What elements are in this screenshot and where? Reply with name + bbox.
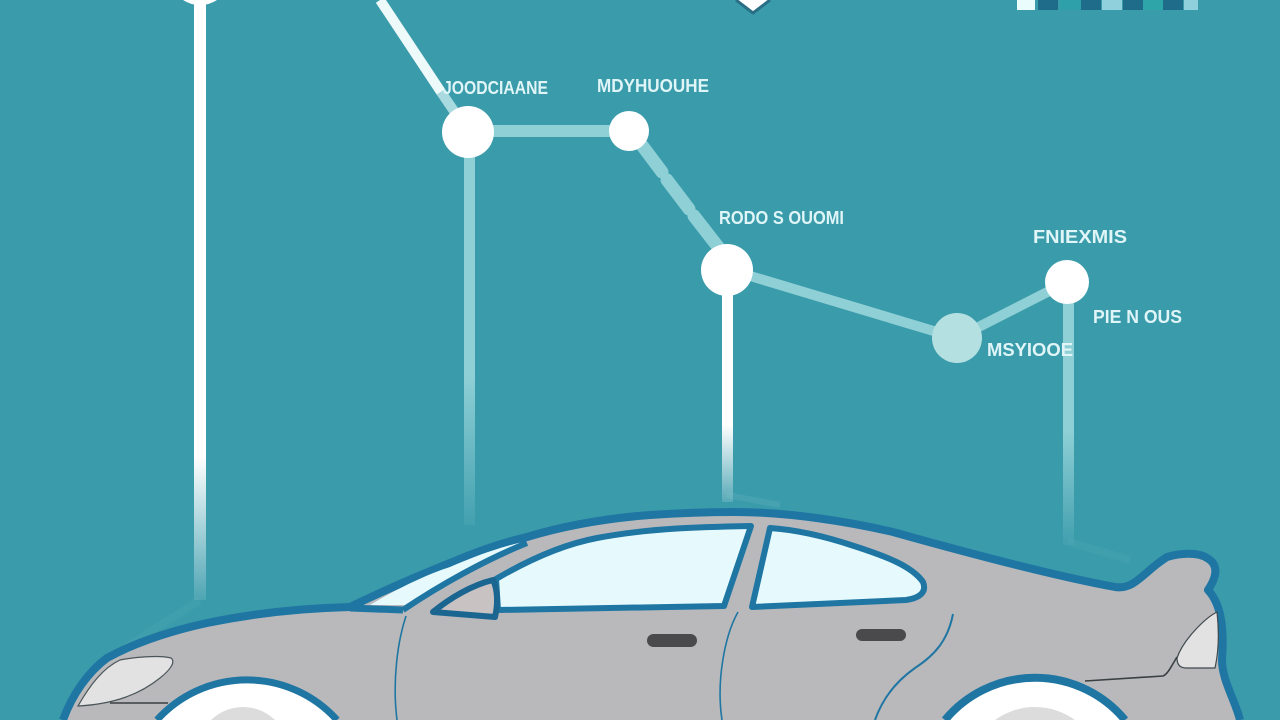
vertical drop line 4 [1063, 290, 1074, 545]
connector: horizontal [470, 125, 629, 137]
colour legend squares [1017, 0, 1198, 10]
connector: diagonal end [441, 92, 456, 114]
front wheel arch [157, 680, 337, 720]
vertical drop line 3 [722, 280, 733, 502]
node 2 [609, 111, 649, 151]
vertical drop line 2 [464, 150, 475, 525]
A-pillar stripe [403, 543, 527, 610]
label 5: PIE N OUS [1093, 307, 1182, 327]
line chart [125, 0, 1182, 648]
icon: diamond marker [736, 0, 770, 13]
node 5 [1045, 260, 1089, 304]
door seam front [395, 616, 406, 720]
node 1 [442, 106, 494, 158]
door handle front [647, 634, 697, 647]
side mirror [433, 580, 497, 617]
faint foot of drop line 4 [1068, 542, 1130, 560]
faint foot of drop line 1 [125, 600, 200, 648]
front hub [211, 707, 275, 720]
front bumper line [110, 702, 168, 704]
rear bumper line [1085, 657, 1177, 681]
connector: top diagonal [380, 0, 441, 92]
car body [63, 512, 1240, 720]
side window front [496, 526, 751, 610]
rear hub [995, 707, 1075, 720]
node: top left [183, 0, 217, 5]
vertical drop line 1 [194, 0, 206, 600]
label 6: MSYIOOE [987, 340, 1073, 360]
door handle rear [856, 629, 906, 641]
label 2: MDYHUOUHE [597, 76, 709, 96]
door seam rear [875, 614, 953, 720]
connector: long diagonal [727, 269, 957, 338]
door seam middle [720, 612, 738, 720]
connector: dashed diagonal [641, 144, 722, 252]
side window rear [752, 528, 924, 607]
rear wheel [945, 678, 1125, 720]
faint foot of drop line 3 [727, 495, 780, 505]
front wheel [157, 680, 337, 720]
node 3 [701, 244, 753, 296]
rear wheel arch [945, 678, 1125, 720]
car illustration [63, 512, 1240, 720]
lower roof edge stroke [350, 608, 403, 610]
label 1: JOODCIAANE [443, 78, 548, 98]
node 4 [932, 313, 982, 363]
label 3: RODO S OUOMI [719, 208, 844, 228]
connector: rising diagonal [957, 282, 1067, 338]
windshield [370, 542, 523, 605]
headlight [78, 657, 173, 706]
tail light [1177, 612, 1218, 668]
label 4: FNIEXMIS [1033, 227, 1127, 247]
car body outline [63, 512, 1240, 720]
